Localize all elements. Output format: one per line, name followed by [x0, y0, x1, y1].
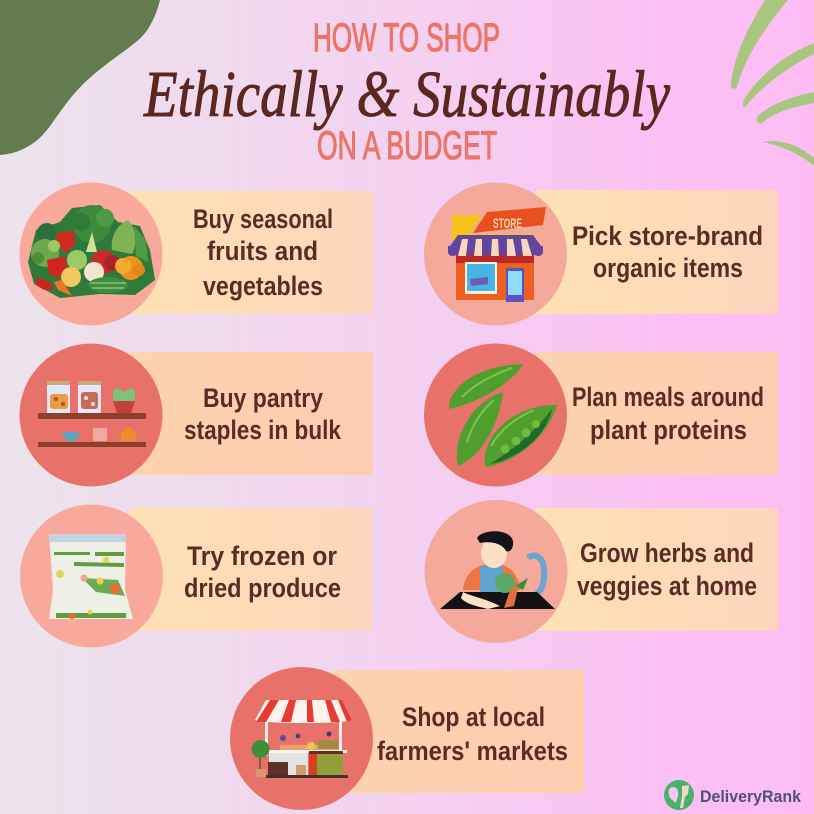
text: grow at home: veggies at home	[577, 571, 757, 601]
panel: store brand	[424, 182, 778, 326]
icon: frozen bag	[49, 534, 133, 619]
text: seasonal: fruits and	[207, 236, 318, 266]
icon: pantry shelves	[38, 381, 146, 447]
text: store brand: Pick store-brand	[572, 221, 763, 251]
title	[143, 16, 671, 168]
logo: DeliveryRank	[664, 780, 802, 810]
text: seasonal: Buy seasonal	[193, 204, 333, 234]
panel: seasonal produce	[20, 182, 373, 326]
icon: gardener at sink	[440, 531, 555, 609]
text: plant proteins	[572, 382, 764, 445]
text: markets	[377, 702, 568, 766]
text: frozen: dried produce	[184, 573, 341, 603]
text: store brand: organic items	[593, 253, 743, 283]
text: pantry: staples in bulk	[184, 415, 341, 445]
text: pantry: Buy pantry	[203, 383, 323, 413]
title: HOW TO SHOP	[313, 16, 500, 60]
panel: farmers markets	[230, 667, 584, 810]
text: plant proteins: plant proteins	[590, 415, 747, 445]
icon: pea pods	[449, 364, 557, 467]
title: ON A BUDGET	[317, 124, 497, 168]
text: pantry	[184, 383, 341, 445]
text: plant proteins: Plan meals around	[572, 382, 764, 412]
text: seasonal: vegetables	[203, 271, 323, 301]
panel: frozen produce	[20, 504, 372, 648]
panel: pantry staples	[20, 344, 373, 486]
decorative green blob	[0, 0, 160, 155]
text: seasonal	[193, 204, 333, 301]
text: frozen	[184, 541, 341, 603]
text: markets: Shop at local	[402, 702, 545, 732]
text: markets: farmers' markets	[377, 736, 568, 766]
icon: store	[448, 207, 546, 302]
icon: market stall	[252, 700, 352, 778]
text: grow at home: Grow herbs and	[580, 538, 754, 568]
script heading: Ethically & Sustainably	[143, 58, 671, 131]
panel: grow at home	[424, 500, 778, 643]
panel: plant proteins	[424, 344, 778, 486]
icon: store: STORE	[493, 215, 522, 231]
decorative leaves	[731, 0, 814, 166]
logo: DeliveryRank: DeliveryRank	[700, 787, 802, 806]
text: grow at home	[577, 538, 757, 601]
icon: vegetables	[28, 205, 155, 298]
text: frozen: Try frozen or	[187, 541, 337, 571]
text: store brand	[572, 221, 763, 283]
